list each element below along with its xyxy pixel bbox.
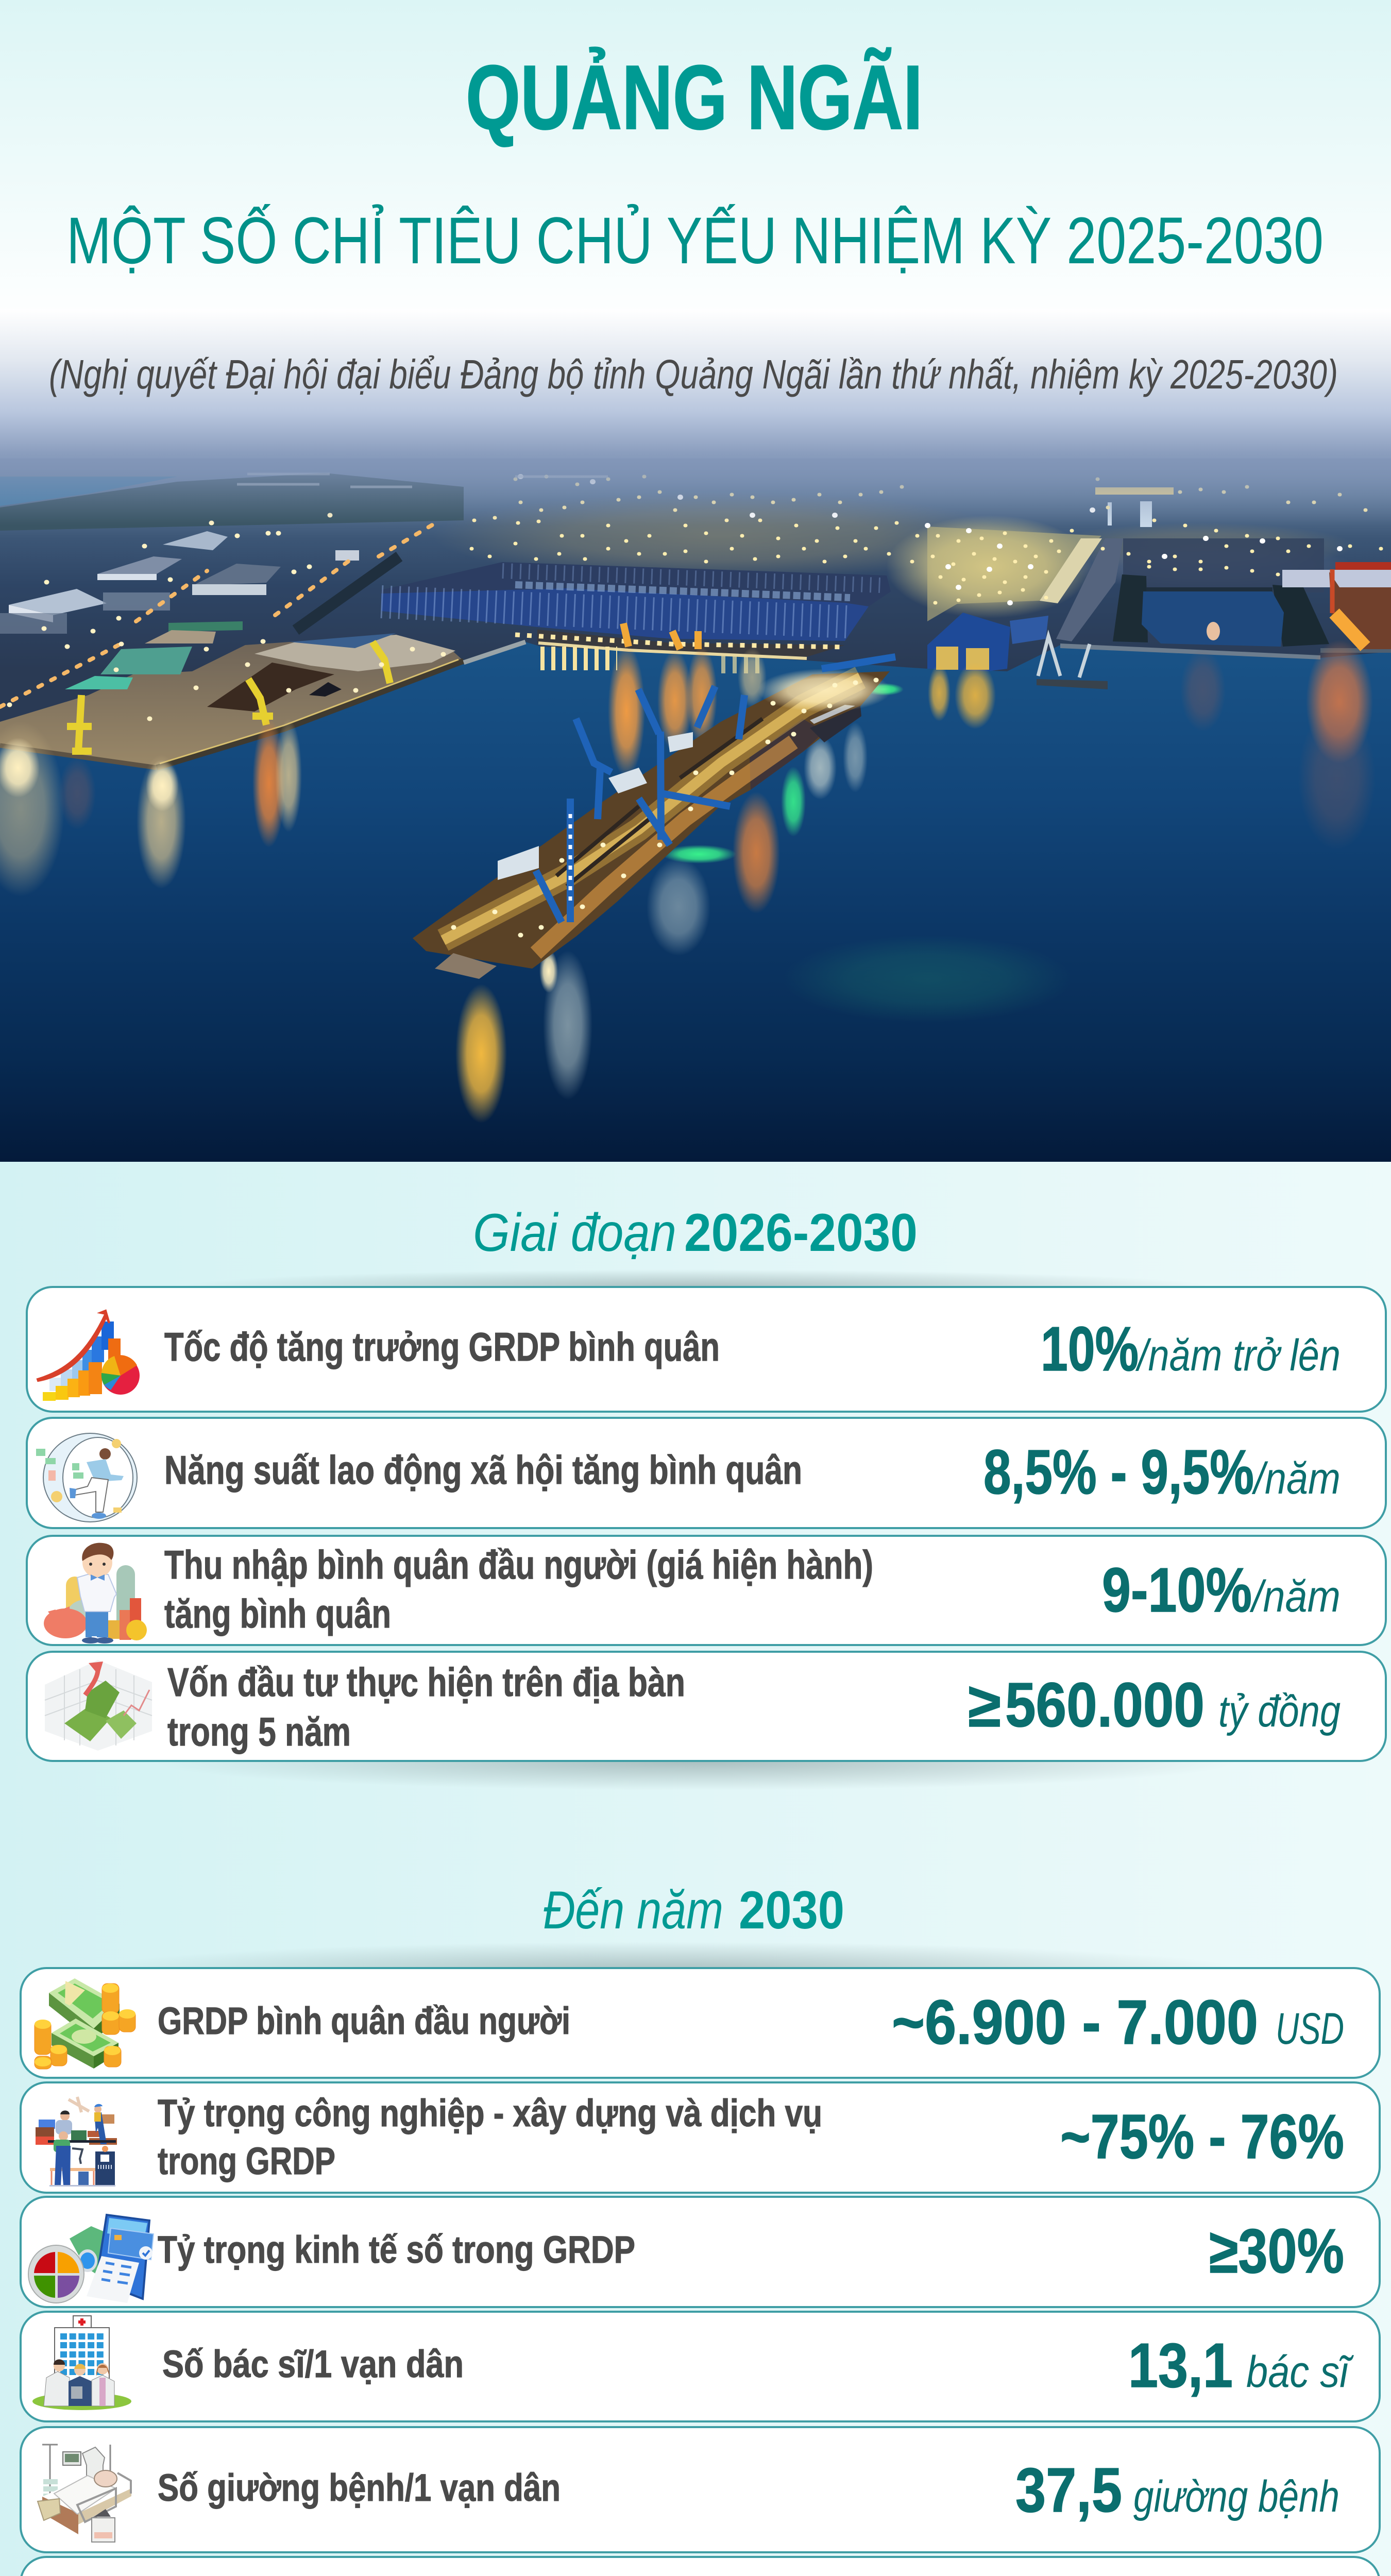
value: 9-10% bbox=[1102, 1555, 1252, 1625]
icon: boy with piggy bank and bars bbox=[44, 1543, 147, 1643]
icon: money stacks on chart grid bbox=[45, 1660, 152, 1751]
page background: top bbox=[0, 0, 1391, 330]
card: digital economy share bbox=[21, 2197, 1380, 2307]
card: hospital beds bbox=[21, 2427, 1380, 2552]
heading: Đến năm 2030 bbox=[543, 1880, 844, 1940]
card: national standard schools bbox=[21, 2557, 1380, 2576]
value: 10% bbox=[1041, 1314, 1139, 1384]
icon: bar chart with pie and arrow bbox=[38, 1311, 140, 1401]
label: tăng bình quân bbox=[164, 1591, 391, 1636]
value: /năm trở lên bbox=[1135, 1331, 1341, 1380]
label: trong GRDP bbox=[158, 2140, 335, 2182]
value: ≥30% bbox=[1209, 2216, 1344, 2286]
icon: banknotes and coins bbox=[35, 1978, 135, 2069]
card: income per capita bbox=[27, 1536, 1386, 1645]
value: bác sĩ bbox=[1246, 2347, 1354, 2397]
page background: section to 2030 bbox=[0, 1886, 1391, 2576]
value: 37,5 bbox=[1015, 2455, 1122, 2525]
heading: Giai đoạn 2026-2030: 2026-2030 bbox=[684, 1203, 918, 1263]
value bbox=[1128, 2330, 1354, 2400]
icon: hospital and medical staff bbox=[32, 2316, 131, 2410]
value bbox=[968, 1670, 1341, 1740]
label: Tỷ trọng kinh tế số trong GRDP bbox=[158, 2228, 635, 2271]
value: /năm bbox=[1252, 1454, 1341, 1503]
card: industry share bbox=[21, 2082, 1380, 2193]
card: labour productivity bbox=[27, 1418, 1386, 1528]
title: QUẢNG NGÃI bbox=[466, 46, 923, 148]
label bbox=[164, 1542, 873, 1636]
card: investment capital bbox=[27, 1652, 1386, 1761]
heading: Giai đoạn 2026-2030: Giai đoạn bbox=[473, 1203, 676, 1263]
value bbox=[1041, 1314, 1341, 1384]
value: 560.000 bbox=[1005, 1670, 1205, 1740]
value: 13,1 bbox=[1128, 2330, 1233, 2400]
label: Tỷ trọng công nghiệp - xây dựng và dịch vụ bbox=[158, 2092, 822, 2134]
heading: Giai đoạn 2026-2030 bbox=[473, 1203, 918, 1263]
label: trong 5 năm bbox=[167, 1709, 351, 1754]
value: 8,5% - 9,5% bbox=[983, 1437, 1254, 1507]
icon: phone, payment terminal and pie bbox=[28, 2215, 154, 2303]
value: giường bệnh bbox=[1133, 2472, 1339, 2521]
label: Vốn đầu tư thực hiện trên địa bàn bbox=[167, 1659, 685, 1705]
card: GRDP growth bbox=[27, 1287, 1386, 1412]
icon: hospital bed in ward bbox=[38, 2445, 131, 2542]
icon: workers and factory bbox=[36, 2097, 117, 2187]
value: tỷ đồng bbox=[1218, 1687, 1341, 1736]
page background: section 2026-2030 bbox=[0, 1162, 1391, 1886]
label: Số bác sĩ/1 vạn dân bbox=[162, 2343, 464, 2385]
label bbox=[167, 1659, 685, 1754]
label: GRDP bình quân đầu người bbox=[158, 1999, 570, 2042]
value: /năm bbox=[1250, 1572, 1341, 1621]
label: Tốc độ tăng trưởng GRDP bình quân bbox=[164, 1324, 720, 1369]
card: GRDP per capita bbox=[21, 1968, 1380, 2078]
panel: section 2026-2030 bbox=[27, 1269, 1386, 1790]
value bbox=[1015, 2455, 1339, 2525]
label: Năng suất lao động xã hội tăng bình quân bbox=[164, 1447, 802, 1493]
value: ~6.900 - 7.000 bbox=[892, 1987, 1258, 2057]
panel: section to 2030 bbox=[21, 1942, 1380, 2576]
label: Thu nhập bình quân đầu người (giá hiện hành) bbox=[164, 1542, 873, 1587]
icon: man running in wheel bbox=[36, 1433, 137, 1522]
card: doctors bbox=[21, 2312, 1380, 2421]
label bbox=[158, 2092, 822, 2182]
photo: aerial view of Dung Quat port at dusk bbox=[0, 309, 1391, 1162]
value: USD bbox=[1276, 2004, 1344, 2054]
label: Số giường bệnh/1 vạn dân bbox=[158, 2466, 561, 2509]
value: ≥ bbox=[968, 1670, 1001, 1740]
